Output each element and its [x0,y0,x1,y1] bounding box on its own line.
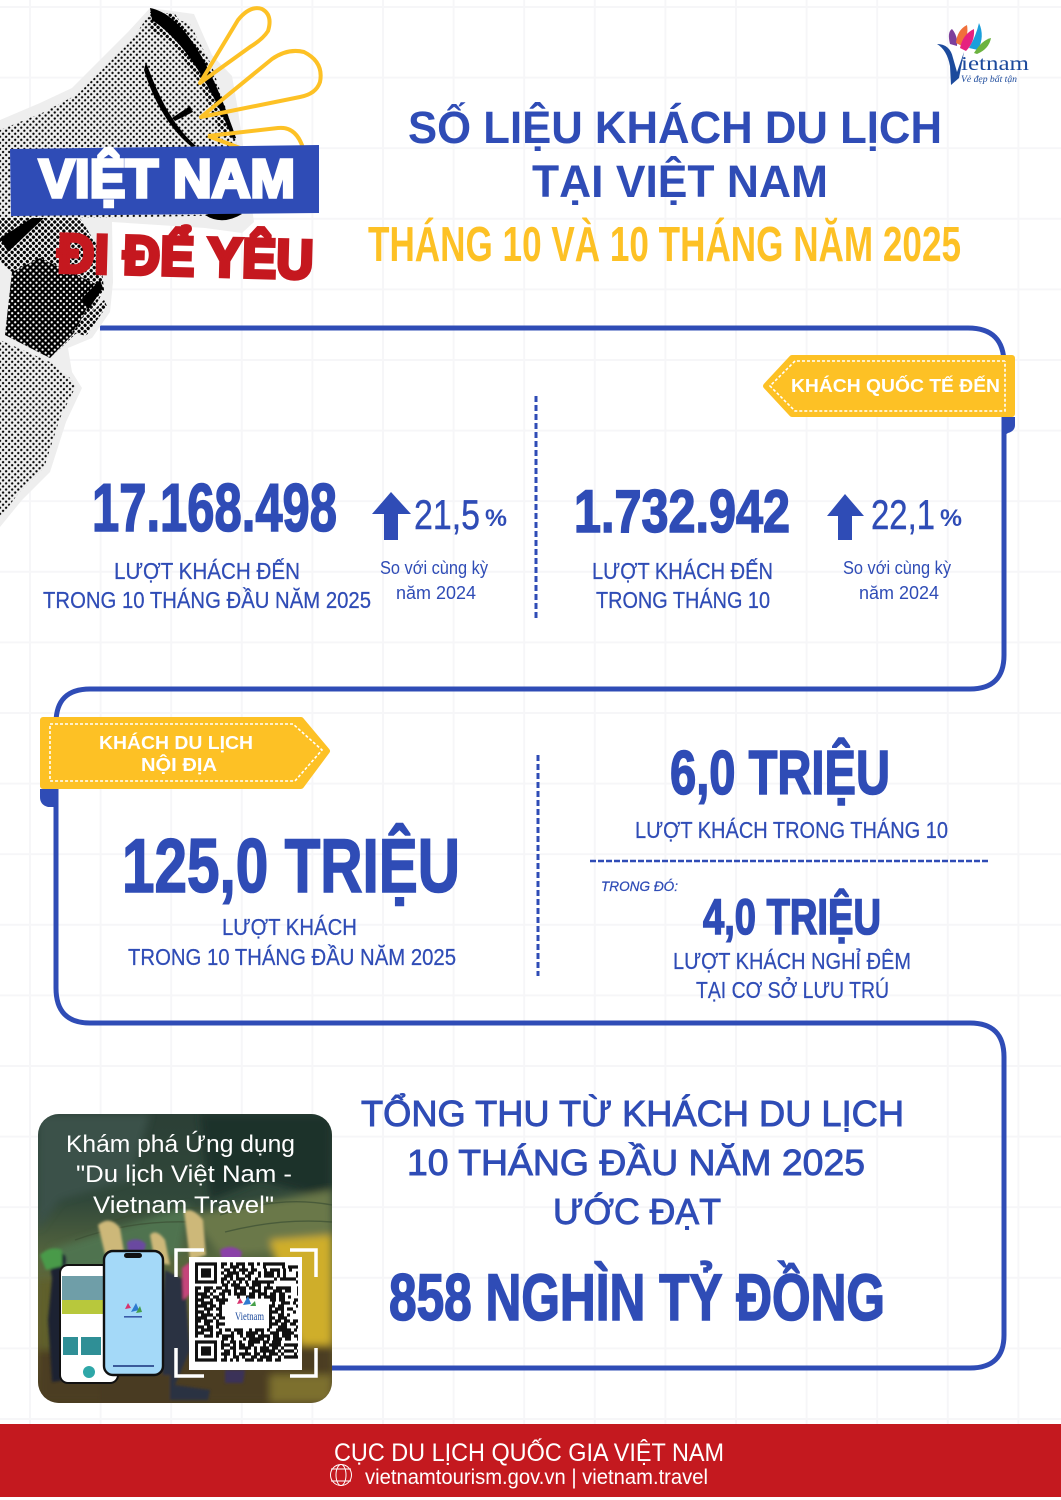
app promo card: photo, phones and QR code [38,1114,332,1403]
title: SỐ LIỆU KHÁCH DU LỊCH [408,102,942,153]
stat: 4,0 triệu overnight visitors: TRONG ĐÓ: [601,878,678,894]
icon: yellow sound rays [200,8,321,148]
revenue block: total tourism revenue: 10 THÁNG ĐẦU NĂM 2025 [407,1142,865,1183]
phone: home screen [60,1265,118,1383]
stat: 17.168.498 international visitors in 10 months: LƯỢT KHÁCH ĐẾN [114,557,300,584]
stat: growth 22,1%: năm 2024 [859,583,939,603]
logo: Vietnam tourism: Vẻ đẹp bất tận [961,74,1017,85]
tag: khách du lịch nội địa: NỘI ĐỊA [141,754,217,775]
panel outline: continuous blue border [56,328,1004,1368]
stat: 4,0 triệu overnight visitors: LƯỢT KHÁCH NGHỈ ĐÊM [673,946,911,974]
stat: 1.732.942 international visitors in October: 1.732.942 [574,478,790,545]
slogan: Đi để yêu: ĐI ĐỂ YÊU [57,222,314,291]
stat: 17.168.498 international visitors in 10 months: TRONG 10 THÁNG ĐẦU NĂM 2025 [43,586,371,613]
stat: 1.732.942 international visitors in October [574,478,790,613]
stat: 4,0 triệu overnight visitors: 4,0 TRIỆU [703,889,881,945]
stat: 125,0 triệu domestic visitors: 125,0 TRIỆU [122,823,460,909]
stat: 6,0 triệu in October: 6,0 TRIỆU [670,739,890,808]
stat: growth 22,1%: So với cùng kỳ [843,558,951,578]
stat: 1.732.942 international visitors in October: TRONG THÁNG 10 [596,587,770,613]
stat: growth 21,5%: So với cùng kỳ [380,558,488,578]
stat: 4,0 triệu overnight visitors: TẠI CƠ SỞ LƯU TRÚ [696,975,889,1003]
title [368,102,961,272]
stat: growth 21,5% [372,491,507,603]
stat: 1.732.942 international visitors in October: LƯỢT KHÁCH ĐẾN [592,557,773,584]
stat: 17.168.498 international visitors in 10 months: 17.168.498 [92,470,337,546]
stat: 17.168.498 international visitors in 10 months [43,470,371,613]
phone: splash screen [104,1251,163,1375]
revenue block: total tourism revenue: ƯỚC ĐẠT [553,1191,721,1232]
stat: growth 22,1%: % [940,505,962,532]
stat: growth 21,5%: năm 2024 [396,583,476,603]
stat: growth 22,1% [827,491,962,603]
illustration: halftone megaphone [0,8,254,527]
banner: Việt Nam: VIỆT NAM [39,148,295,209]
stat: growth 22,1%: 22,1 [871,491,935,538]
title: TẠI VIỆT NAM [532,156,828,207]
stat: 125,0 triệu domestic visitors [122,823,460,970]
tag: khách quốc tế đến: KHÁCH QUỐC TẾ ĐẾN [791,375,1000,396]
app promo card: photo, phones and QR code: "Du lịch Việt Nam - [76,1161,292,1188]
stat: 125,0 triệu domestic visitors: TRONG 10 THÁNG ĐẦU NĂM 2025 [128,943,456,970]
app promo card: photo, phones and QR code: Vietnam Travel" [93,1192,274,1219]
tag: khách du lịch nội địa: KHÁCH DU LỊCH [99,732,253,753]
tag: khách du lịch nội địa [40,720,327,807]
footer bar: CỤC DU LỊCH QUỐC GIA VIỆT NAM [334,1437,724,1467]
stat: growth 21,5%: 21,5 [414,491,480,538]
revenue block: total tourism revenue: TỔNG THU TỪ KHÁCH DU LỊCH [361,1091,904,1134]
footer bar: vietnamtourism.gov.vn | vietnam.travel [365,1466,708,1489]
stat: growth 21,5%: % [485,505,507,532]
logo: Vietnam tourism: ietnam [961,53,1030,75]
app promo card: photo, phones and QR code: Khám phá Ứng dụng [66,1131,295,1158]
revenue block: total tourism revenue [361,1091,904,1334]
revenue block: total tourism revenue: 858 NGHÌN TỶ ĐỒNG [389,1260,885,1334]
QR code with corner brackets: Vietnam [235,1309,264,1323]
footer bar [0,1424,1061,1497]
tag: khách quốc tế đến [766,358,1015,437]
stat: 6,0 triệu in October: LƯỢT KHÁCH TRONG THÁNG 10 [635,817,948,843]
QR code with corner brackets [176,1250,316,1376]
icon: globe www [330,1464,352,1486]
stat: 6,0 triệu in October [635,739,948,843]
stat: 4,0 triệu overnight visitors [601,878,911,1003]
logo: Vietnam tourism [937,23,1030,85]
stat: 125,0 triệu domestic visitors: LƯỢT KHÁCH [222,914,357,940]
